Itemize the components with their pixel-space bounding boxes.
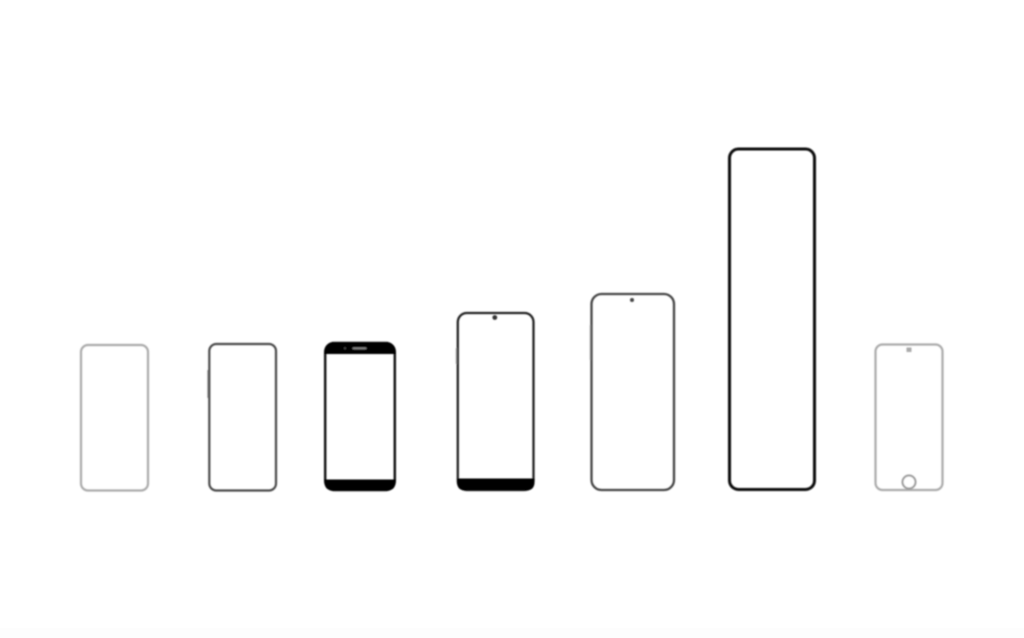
phone 2: dark grey outline with side button (208, 344, 276, 490)
phone 4: punch-hole camera and black chin (456, 313, 534, 490)
phone 1: light grey outline (81, 345, 148, 490)
phone 5: tall outline with punch-hole camera (590, 294, 674, 490)
phone 7: light grey outline with home button (876, 344, 942, 490)
speaker and camera (344, 347, 366, 349)
phone 3: black top and bottom bezels (324, 342, 396, 490)
phone 6: tallest heavy black outline (730, 149, 814, 490)
